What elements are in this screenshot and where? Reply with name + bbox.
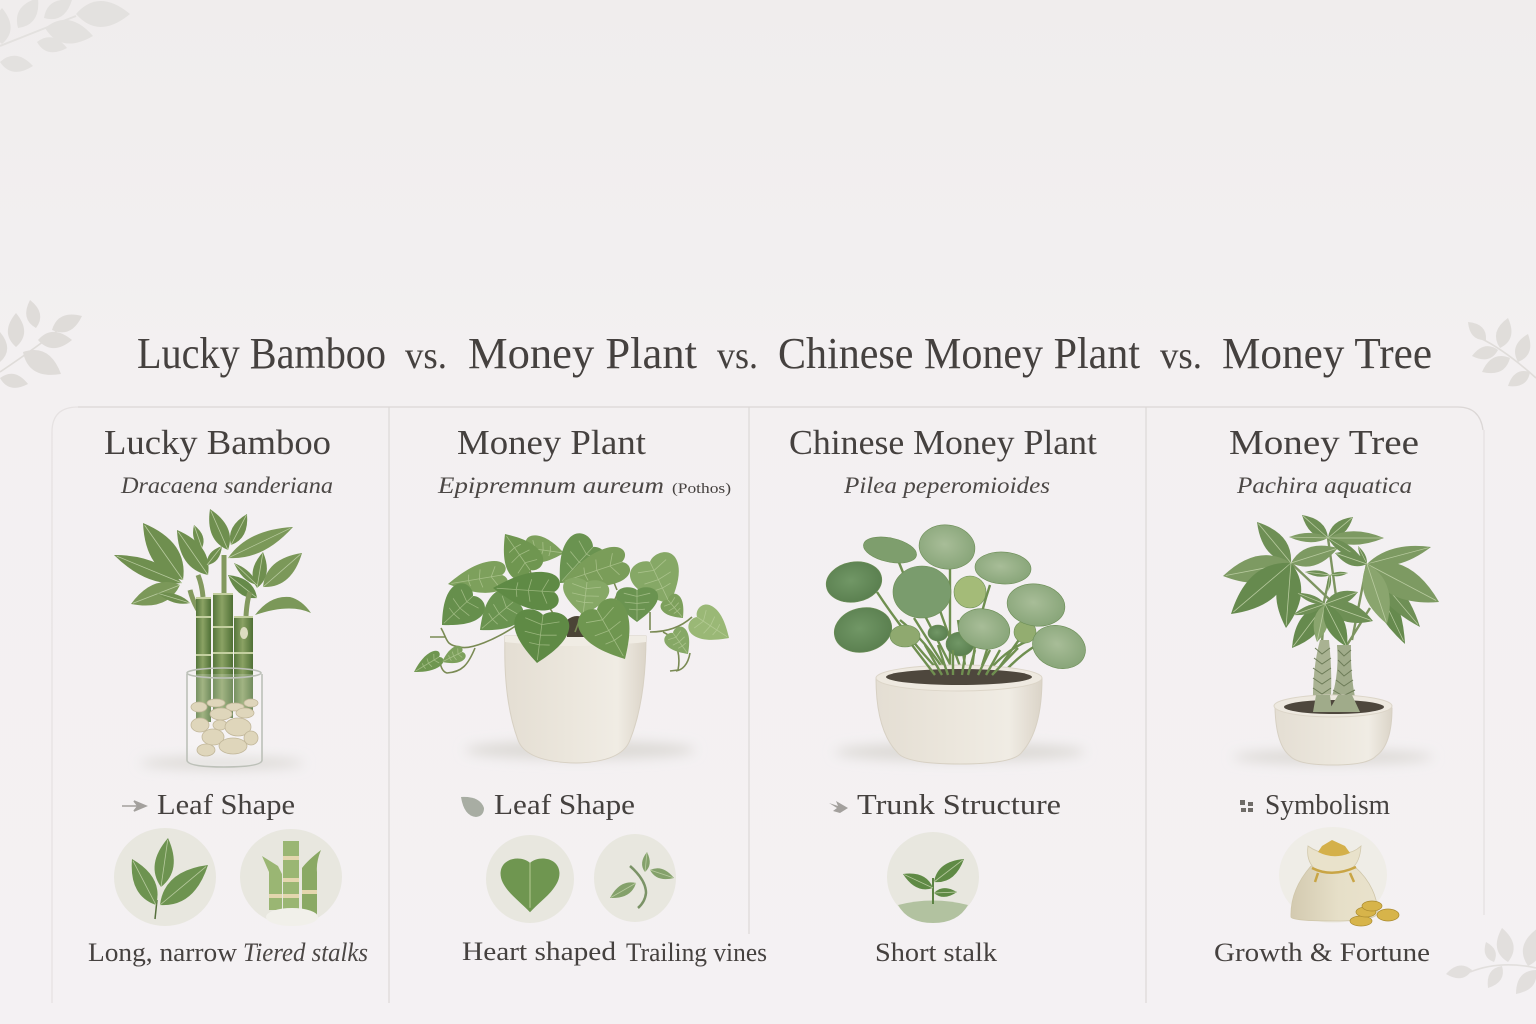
feature heading: symbolism: Symbolism bbox=[1265, 790, 1390, 821]
title bbox=[137, 329, 1432, 378]
title: Lucky Bamboo bbox=[137, 329, 386, 378]
panel: money tree bbox=[1214, 423, 1446, 967]
caption: heart shaped: Heart shaped bbox=[462, 937, 616, 966]
icon: money bag with coins bbox=[1279, 827, 1399, 926]
heading: money tree: Money Tree bbox=[1229, 423, 1419, 462]
title: Money Plant bbox=[468, 329, 697, 378]
decorative leaf sprig: left edge bbox=[0, 299, 85, 391]
title: vs. bbox=[1160, 335, 1202, 377]
illustration: pilea in white bowl bbox=[823, 521, 1091, 764]
caption: tiered stalks: Tiered stalks bbox=[243, 938, 368, 967]
icon: trailing vines bbox=[594, 834, 676, 922]
scientific name: epipremnum aureum: Epipremnum aureum bbox=[437, 473, 664, 498]
title: Chinese Money Plant bbox=[778, 329, 1140, 378]
icon: short stalk sprout bbox=[887, 832, 979, 923]
heading: chinese money plant: Chinese Money Plant bbox=[789, 423, 1097, 462]
caption: trailing vines: Trailing vines bbox=[626, 938, 767, 967]
icon: heart shaped leaf bbox=[486, 835, 574, 923]
scientific name: pilea peperomioides: Pilea peperomioides bbox=[843, 473, 1050, 498]
illustration: lucky bamboo in glass bbox=[111, 506, 311, 769]
feature heading: leaf shape: Leaf Shape bbox=[494, 790, 635, 821]
scientific name: pachira aquatica: Pachira aquatica bbox=[1236, 473, 1412, 498]
decorative leaf sprig: bottom right bbox=[1445, 926, 1536, 999]
scientific name: dracaena sanderiana: Dracaena sanderiana bbox=[120, 473, 333, 498]
caption: growth & fortune: Growth & Fortune bbox=[1214, 938, 1430, 967]
heading: lucky bamboo: Lucky Bamboo bbox=[104, 423, 331, 462]
caption: short stalk: Short stalk bbox=[875, 938, 997, 967]
illustration: pothos in white pot bbox=[410, 523, 739, 763]
decorative leaf sprig: top left bbox=[0, 0, 130, 74]
icon: tiered stalks bbox=[240, 829, 342, 926]
icon: narrow leaves bbox=[114, 828, 216, 926]
comparison table frame bbox=[52, 407, 1484, 1003]
scientific name: epipremnum aureum: (Pothos) bbox=[672, 481, 731, 497]
feature heading: trunk structure: Trunk Structure bbox=[857, 790, 1061, 821]
title: Money Tree bbox=[1222, 329, 1432, 378]
title: vs. bbox=[405, 335, 447, 377]
illustration: braided money tree bbox=[1221, 510, 1446, 765]
scientific name: epipremnum aureum bbox=[437, 473, 731, 498]
caption: long, narrow: Long, narrow bbox=[88, 938, 237, 967]
panel: lucky bamboo bbox=[88, 423, 368, 967]
panel: money plant bbox=[410, 423, 767, 967]
panel: chinese money plant bbox=[789, 423, 1097, 967]
feature heading: leaf shape: Leaf Shape bbox=[157, 790, 295, 821]
heading: money plant: Money Plant bbox=[457, 423, 646, 462]
decorative leaf sprig: right edge bbox=[1464, 316, 1536, 391]
title: vs. bbox=[717, 335, 758, 377]
